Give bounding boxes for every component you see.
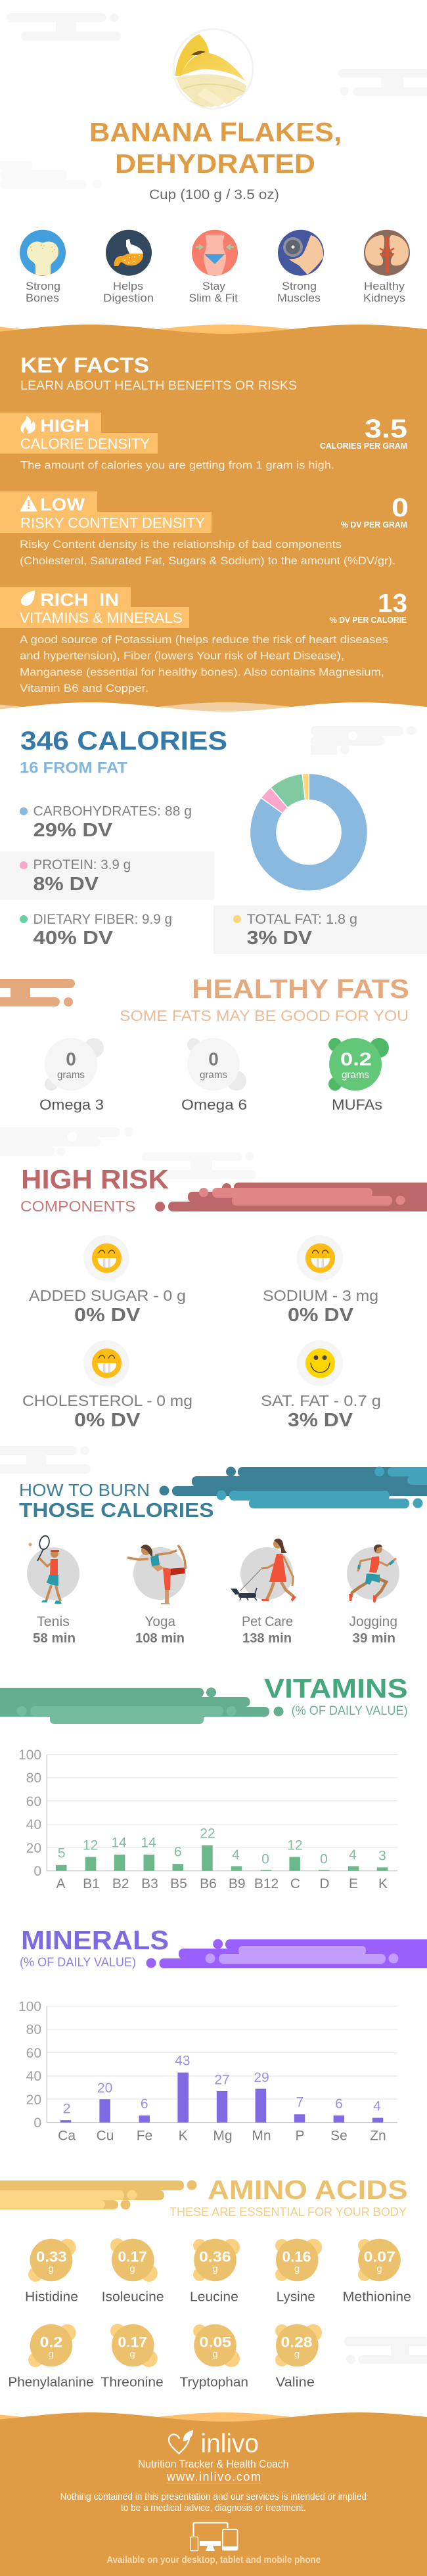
item: sodium: SODIUM - 3 mg xyxy=(263,1287,378,1304)
bar chart: vitamins xyxy=(18,1748,397,1891)
heading: healthy fats: HEALTHY FATS xyxy=(192,974,409,1004)
bar chart: minerals: 60 xyxy=(26,2046,41,2061)
bubble: tryptophan: Tryptophan xyxy=(180,2376,248,2390)
heading: high risk: HIGH RISK xyxy=(21,1164,169,1194)
fact: high calorie density: CALORIE DENSITY xyxy=(20,436,150,452)
bubble: leucine: g xyxy=(212,2263,218,2274)
bar chart: vitamins: 0 xyxy=(34,1864,41,1879)
activity: jogging: 39 min xyxy=(352,1631,395,1646)
bar chart: vitamins: 100 xyxy=(18,1748,41,1763)
bar chart: minerals: 6 xyxy=(141,2096,148,2112)
activity: yoga: Yoga xyxy=(145,1614,175,1629)
fact: low risky content density: % DV PER GRAM xyxy=(341,520,407,530)
heading: minerals: MINERALS xyxy=(21,1925,169,1955)
bubble: isoleucine xyxy=(102,2238,164,2305)
fact: high calorie density xyxy=(0,413,407,472)
bar chart: vitamins: B1 xyxy=(83,1876,100,1891)
heading: vitamins: VITAMINS xyxy=(264,1673,408,1704)
bar chart: minerals xyxy=(18,1999,397,2144)
legend: total fat xyxy=(214,905,427,954)
icon: helps digestion: Digestion xyxy=(103,292,154,304)
benefit icons row xyxy=(20,230,410,304)
bar chart: vitamins: C xyxy=(290,1876,300,1891)
legend: protein: PROTEIN: 3.9 g xyxy=(33,857,131,872)
legend: carbohydrates: 29% DV xyxy=(33,820,112,841)
bar chart: minerals: 20 xyxy=(97,2081,112,2096)
bubble: threonine: Threonine xyxy=(101,2376,164,2390)
bar chart: minerals: 6 xyxy=(335,2096,343,2112)
bar chart: minerals: Zn xyxy=(370,2129,386,2144)
bubble: histidine: g xyxy=(48,2263,54,2274)
bar chart: minerals: Mn xyxy=(252,2129,271,2144)
activity: pet care xyxy=(231,1539,296,1646)
donut chart xyxy=(250,773,367,891)
bubble: tryptophan: g xyxy=(212,2349,218,2360)
bubble: histidine: 0.33 xyxy=(36,2249,67,2265)
bar chart: vitamins: 80 xyxy=(26,1771,41,1786)
bar chart: vitamins: B3 xyxy=(141,1876,158,1891)
fact: low risky content density: (Cholesterol, Saturated Fat, Sugars & Sodium) to the amount (%DV/gr). xyxy=(20,554,395,567)
fact: high calorie density: CALORIES PER GRAM xyxy=(320,441,407,451)
item: added sugar: ADDED SUGAR - 0 g xyxy=(29,1287,186,1304)
subheading: components: COMPONENTS xyxy=(20,1198,135,1215)
bar chart: vitamins: 12 xyxy=(287,1838,303,1853)
bar chart: minerals: 7 xyxy=(296,2095,303,2110)
bar chart: vitamins: D xyxy=(319,1876,330,1891)
title: DEHYDRATED xyxy=(115,148,315,179)
heading: key facts: KEY FACTS xyxy=(20,353,149,377)
bubble: histidine: Histidine xyxy=(25,2290,78,2305)
bubble: phenylalanine: 0.2 xyxy=(39,2334,62,2351)
bubble: methionine: Methionine xyxy=(343,2290,411,2305)
panel: calories xyxy=(0,726,427,954)
bubble: phenylalanine: Phenylalanine xyxy=(8,2376,94,2390)
icon: helps digestion: Helps xyxy=(113,280,143,292)
bar chart: vitamins: B12 xyxy=(254,1876,279,1891)
bar chart: vitamins: B9 xyxy=(229,1876,246,1891)
bubble: threonine: g xyxy=(129,2349,135,2360)
bubble: mufas: 0.2 xyxy=(340,1049,372,1070)
bubble: isoleucine: g xyxy=(129,2263,135,2274)
icon: strong bones xyxy=(20,230,66,304)
bar chart: minerals: 0 xyxy=(34,2115,41,2131)
subheading: THESE ARE ESSENTIAL FOR YOUR BODY xyxy=(169,2205,407,2219)
bar chart: vitamins: 4 xyxy=(232,1847,240,1863)
bubble: omega 6 xyxy=(181,1038,247,1113)
availability note: Available on your desktop, tablet and mobile phone xyxy=(106,2555,321,2565)
bar chart: vitamins: 22 xyxy=(200,1826,215,1842)
legend: dietary fiber: 40% DV xyxy=(33,928,113,949)
subheading: (% OF DAILY VALUE) xyxy=(20,1956,136,1970)
bar chart: vitamins: 0 xyxy=(320,1852,328,1867)
fact: low risky content density: Risky Content density is the relationship of bad components xyxy=(20,538,342,551)
bar chart: minerals: Ca xyxy=(58,2129,76,2144)
icon: helps digestion xyxy=(103,230,154,304)
bar chart: minerals: K xyxy=(179,2129,188,2144)
bubble: methionine: g xyxy=(376,2263,382,2274)
legend: total fat: TOTAL FAT: 1.8 g xyxy=(247,912,357,927)
panel: key facts xyxy=(0,325,427,719)
bar chart: minerals: 4 xyxy=(373,2099,381,2114)
bubble: valine: 0.28 xyxy=(281,2334,313,2351)
icon: strong muscles: Muscles xyxy=(277,292,321,304)
fact: rich in vitamins and minerals: Vitamin B6 and Copper. xyxy=(20,682,148,694)
bar chart: vitamins: 0 xyxy=(261,1852,269,1867)
bubble: isoleucine: 0.17 xyxy=(118,2249,147,2265)
bar chart: vitamins: B5 xyxy=(170,1876,187,1891)
bubble: lysine: Lysine xyxy=(277,2290,315,2305)
icon: stay slim and fit xyxy=(189,230,238,304)
bubble: omega 3: 0 xyxy=(66,1049,76,1070)
icon: stay slim and fit: Stay xyxy=(202,280,225,292)
subheading: (% OF DAILY VALUE) xyxy=(292,1704,408,1718)
fact: rich in vitamins and minerals xyxy=(0,587,407,694)
item: saturated fat: 3% DV xyxy=(288,1410,353,1431)
item: cholesterol xyxy=(22,1340,192,1431)
bubble: mufas: MUFAs xyxy=(332,1096,382,1113)
heading: amino acids: AMINO ACIDS xyxy=(208,2175,408,2205)
bubble: omega 3: Omega 3 xyxy=(39,1096,104,1113)
heading: calories: 346 CALORIES xyxy=(20,727,227,756)
bar chart: vitamins: 14 xyxy=(111,1836,127,1851)
disclaimer: to be a medical advice, diagnosis or treatment. xyxy=(121,2503,306,2514)
bubble: phenylalanine xyxy=(8,2324,94,2390)
bar chart: minerals: 80 xyxy=(26,2022,41,2037)
bubble: methionine: 0.07 xyxy=(364,2249,395,2265)
activity: yoga xyxy=(127,1545,186,1646)
fact: low risky content density xyxy=(0,491,409,567)
bar chart: vitamins: 4 xyxy=(349,1847,357,1863)
activity: tennis: Tenis xyxy=(37,1614,70,1629)
bar chart: minerals: 100 xyxy=(18,1999,41,2014)
bubble: leucine: Leucine xyxy=(190,2290,238,2305)
bar chart: vitamins: B2 xyxy=(112,1876,129,1891)
bubble: valine: g xyxy=(294,2349,300,2360)
bubble: histidine xyxy=(25,2239,78,2305)
bubble: valine xyxy=(275,2324,322,2390)
bar chart: minerals: Cu xyxy=(97,2129,114,2144)
bubble: tryptophan xyxy=(180,2324,248,2390)
icon: inlivo heart logo xyxy=(169,2430,193,2453)
activity: tennis: 58 min xyxy=(33,1631,76,1646)
bar chart: vitamins: 14 xyxy=(141,1836,156,1851)
fact: high calorie density: HIGH xyxy=(40,416,89,436)
fact: high calorie density: 3.5 xyxy=(365,415,407,443)
panel: vitamins xyxy=(0,1673,408,1891)
bar chart: minerals: 27 xyxy=(214,2072,230,2087)
bubble: isoleucine: Isoleucine xyxy=(102,2290,164,2305)
item: saturated fat: SAT. FAT - 0.7 g xyxy=(261,1392,381,1409)
bubble: leucine: 0.36 xyxy=(199,2249,231,2265)
fact: rich in vitamins and minerals: VITAMINS & MINERALS xyxy=(20,610,183,626)
icon: warning triangle xyxy=(20,495,37,511)
bubble: methionine xyxy=(343,2239,411,2305)
bar chart: vitamins: B6 xyxy=(200,1876,217,1891)
panel: footer xyxy=(0,2412,427,2576)
activity: jogging xyxy=(347,1545,399,1646)
bubble: valine: Valine xyxy=(276,2376,315,2390)
bubble: omega 6: 0 xyxy=(208,1049,219,1070)
bubble: lysine xyxy=(275,2239,322,2305)
icon: strong muscles: Strong xyxy=(282,280,317,292)
bar chart: minerals: Se xyxy=(330,2129,348,2144)
panel: minerals xyxy=(18,1925,427,2144)
bar chart: minerals: 40 xyxy=(26,2069,41,2084)
bar chart: minerals: Fe xyxy=(137,2129,152,2144)
fact: rich in vitamins and minerals: A good source of Potassium (helps reduce the risk of heart diseases xyxy=(20,633,388,646)
disclaimer: Nothing contained in this presentation and our services is intended or implied xyxy=(60,2492,367,2502)
bubble: threonine xyxy=(101,2324,164,2390)
bar chart: minerals: 43 xyxy=(175,2053,190,2068)
legend: protein xyxy=(0,851,214,900)
legend: dietary fiber xyxy=(20,912,172,949)
bubble: omega 3: grams xyxy=(57,1070,85,1081)
fact: rich in vitamins and minerals: 13 xyxy=(378,589,407,618)
bubble: tryptophan: 0.05 xyxy=(200,2334,231,2351)
item: saturated fat xyxy=(261,1340,381,1431)
item: cholesterol: 0% DV xyxy=(74,1410,141,1431)
fact: low risky content density: 0 xyxy=(392,493,409,522)
subheading: LEARN ABOUT HEALTH BENEFITS OR RISKS xyxy=(20,378,297,393)
bubble: omega 6: Omega 6 xyxy=(181,1096,247,1113)
activity: jogging: Jogging xyxy=(349,1614,397,1629)
bubble: omega 6: grams xyxy=(200,1070,227,1081)
bar chart: vitamins: 6 xyxy=(174,1845,182,1860)
bar chart: vitamins: 5 xyxy=(58,1845,66,1861)
bubble: mufas xyxy=(328,1038,389,1113)
panel: high risk components xyxy=(20,1164,427,1431)
fact: rich in vitamins and minerals: % DV PER CALORIE xyxy=(330,615,407,625)
bar chart: vitamins: 3 xyxy=(378,1849,386,1864)
bar chart: minerals: 29 xyxy=(254,2070,269,2085)
legend: carbohydrates: CARBOHYDRATES: 88 g xyxy=(33,804,192,819)
title xyxy=(89,117,342,179)
bar chart: minerals: 2 xyxy=(63,2102,70,2117)
panel: amino acids xyxy=(0,2175,411,2390)
icon: healthy kidneys: Healthy xyxy=(364,280,405,292)
fact: rich in vitamins and minerals: Manganese (essential for healthy bones). Also contains Magnesium, xyxy=(20,666,384,678)
item: added sugar: 0% DV xyxy=(74,1305,141,1326)
bar chart: minerals: P xyxy=(295,2129,305,2144)
icon: leaf xyxy=(21,591,35,606)
tagline: Nutrition Tracker & Health Coach xyxy=(138,2458,289,2470)
bar chart: vitamins: E xyxy=(349,1876,358,1891)
icon: strong bones: Bones xyxy=(26,292,59,304)
icon: strong bones: Strong xyxy=(26,280,60,292)
item: cholesterol: CHOLESTEROL - 0 mg xyxy=(22,1392,192,1409)
item: sodium: 0% DV xyxy=(288,1305,353,1326)
food photo: banana xyxy=(173,29,253,108)
bar chart: minerals: 20 xyxy=(26,2092,41,2108)
bubble: threonine: 0.17 xyxy=(118,2334,147,2351)
bubble: mufas: grams xyxy=(342,1070,369,1081)
fact: rich in vitamins and minerals: and hypertension), Fiber (lowers Your risk of Heart Disease), xyxy=(20,649,344,662)
legend: dietary fiber: DIETARY FIBER: 9.9 g xyxy=(33,912,172,927)
activity: pet care: Pet Care xyxy=(242,1614,293,1629)
icon: flame xyxy=(20,416,35,434)
fact: rich in vitamins and minerals: RICH IN xyxy=(40,590,119,610)
icon: devices xyxy=(191,2523,238,2551)
bar chart: vitamins: 20 xyxy=(26,1841,41,1856)
legend: carbohydrates xyxy=(20,804,192,841)
logo wordmark: inlivo xyxy=(201,2429,259,2458)
background cloud shapes top xyxy=(0,13,427,189)
bubble: omega 3 xyxy=(39,1038,104,1113)
icon: healthy kidneys xyxy=(363,230,410,304)
bubble: phenylalanine: g xyxy=(48,2349,54,2360)
fact: low risky content density: RISKY CONTENT DENSITY xyxy=(20,514,205,531)
bar chart: vitamins: A xyxy=(56,1876,66,1891)
panel: healthy fats xyxy=(0,974,409,1113)
bubble: lysine: 0.16 xyxy=(282,2249,311,2265)
website link: www.inlivo.com xyxy=(166,2470,261,2483)
bubble: lysine: g xyxy=(294,2263,300,2274)
bar chart: vitamins: K xyxy=(378,1876,388,1891)
bubble: leucine xyxy=(190,2239,240,2305)
heading: HOW TO BURN xyxy=(19,1480,150,1500)
icon: stay slim and fit: Slim & Fit xyxy=(189,292,238,304)
legend: protein: 8% DV xyxy=(33,874,99,895)
fact: high calorie density: The amount of calories you are getting from 1 gram is high. xyxy=(20,459,334,472)
legend: total fat: 3% DV xyxy=(247,928,312,949)
panel: how to burn those calories xyxy=(19,1466,427,1646)
subheading: SOME FATS MAY BE GOOD FOR YOU xyxy=(120,1007,409,1024)
heading xyxy=(19,1480,214,1522)
bar chart: vitamins: 12 xyxy=(83,1838,98,1853)
heading: THOSE CALORIES xyxy=(19,1499,214,1522)
disclaimer xyxy=(60,2492,367,2514)
activity: yoga: 108 min xyxy=(135,1631,185,1646)
activity: pet care: 138 min xyxy=(242,1631,292,1646)
subheading: from fat: 16 FROM FAT xyxy=(20,759,127,777)
bar chart: vitamins: 60 xyxy=(26,1794,41,1809)
item: sodium xyxy=(263,1235,378,1326)
icon: healthy kidneys: Kidneys xyxy=(363,292,405,304)
activity: tennis xyxy=(27,1535,79,1646)
serving size: Cup (100 g / 3.5 oz) xyxy=(149,187,279,202)
bar chart: vitamins: 40 xyxy=(26,1817,41,1832)
bar chart: minerals: Mg xyxy=(213,2129,233,2144)
item: added sugar xyxy=(29,1235,186,1326)
icon: strong muscles xyxy=(277,230,324,304)
fact: low risky content density: LOW xyxy=(40,495,85,514)
title: BANANA FLAKES, xyxy=(89,117,342,147)
